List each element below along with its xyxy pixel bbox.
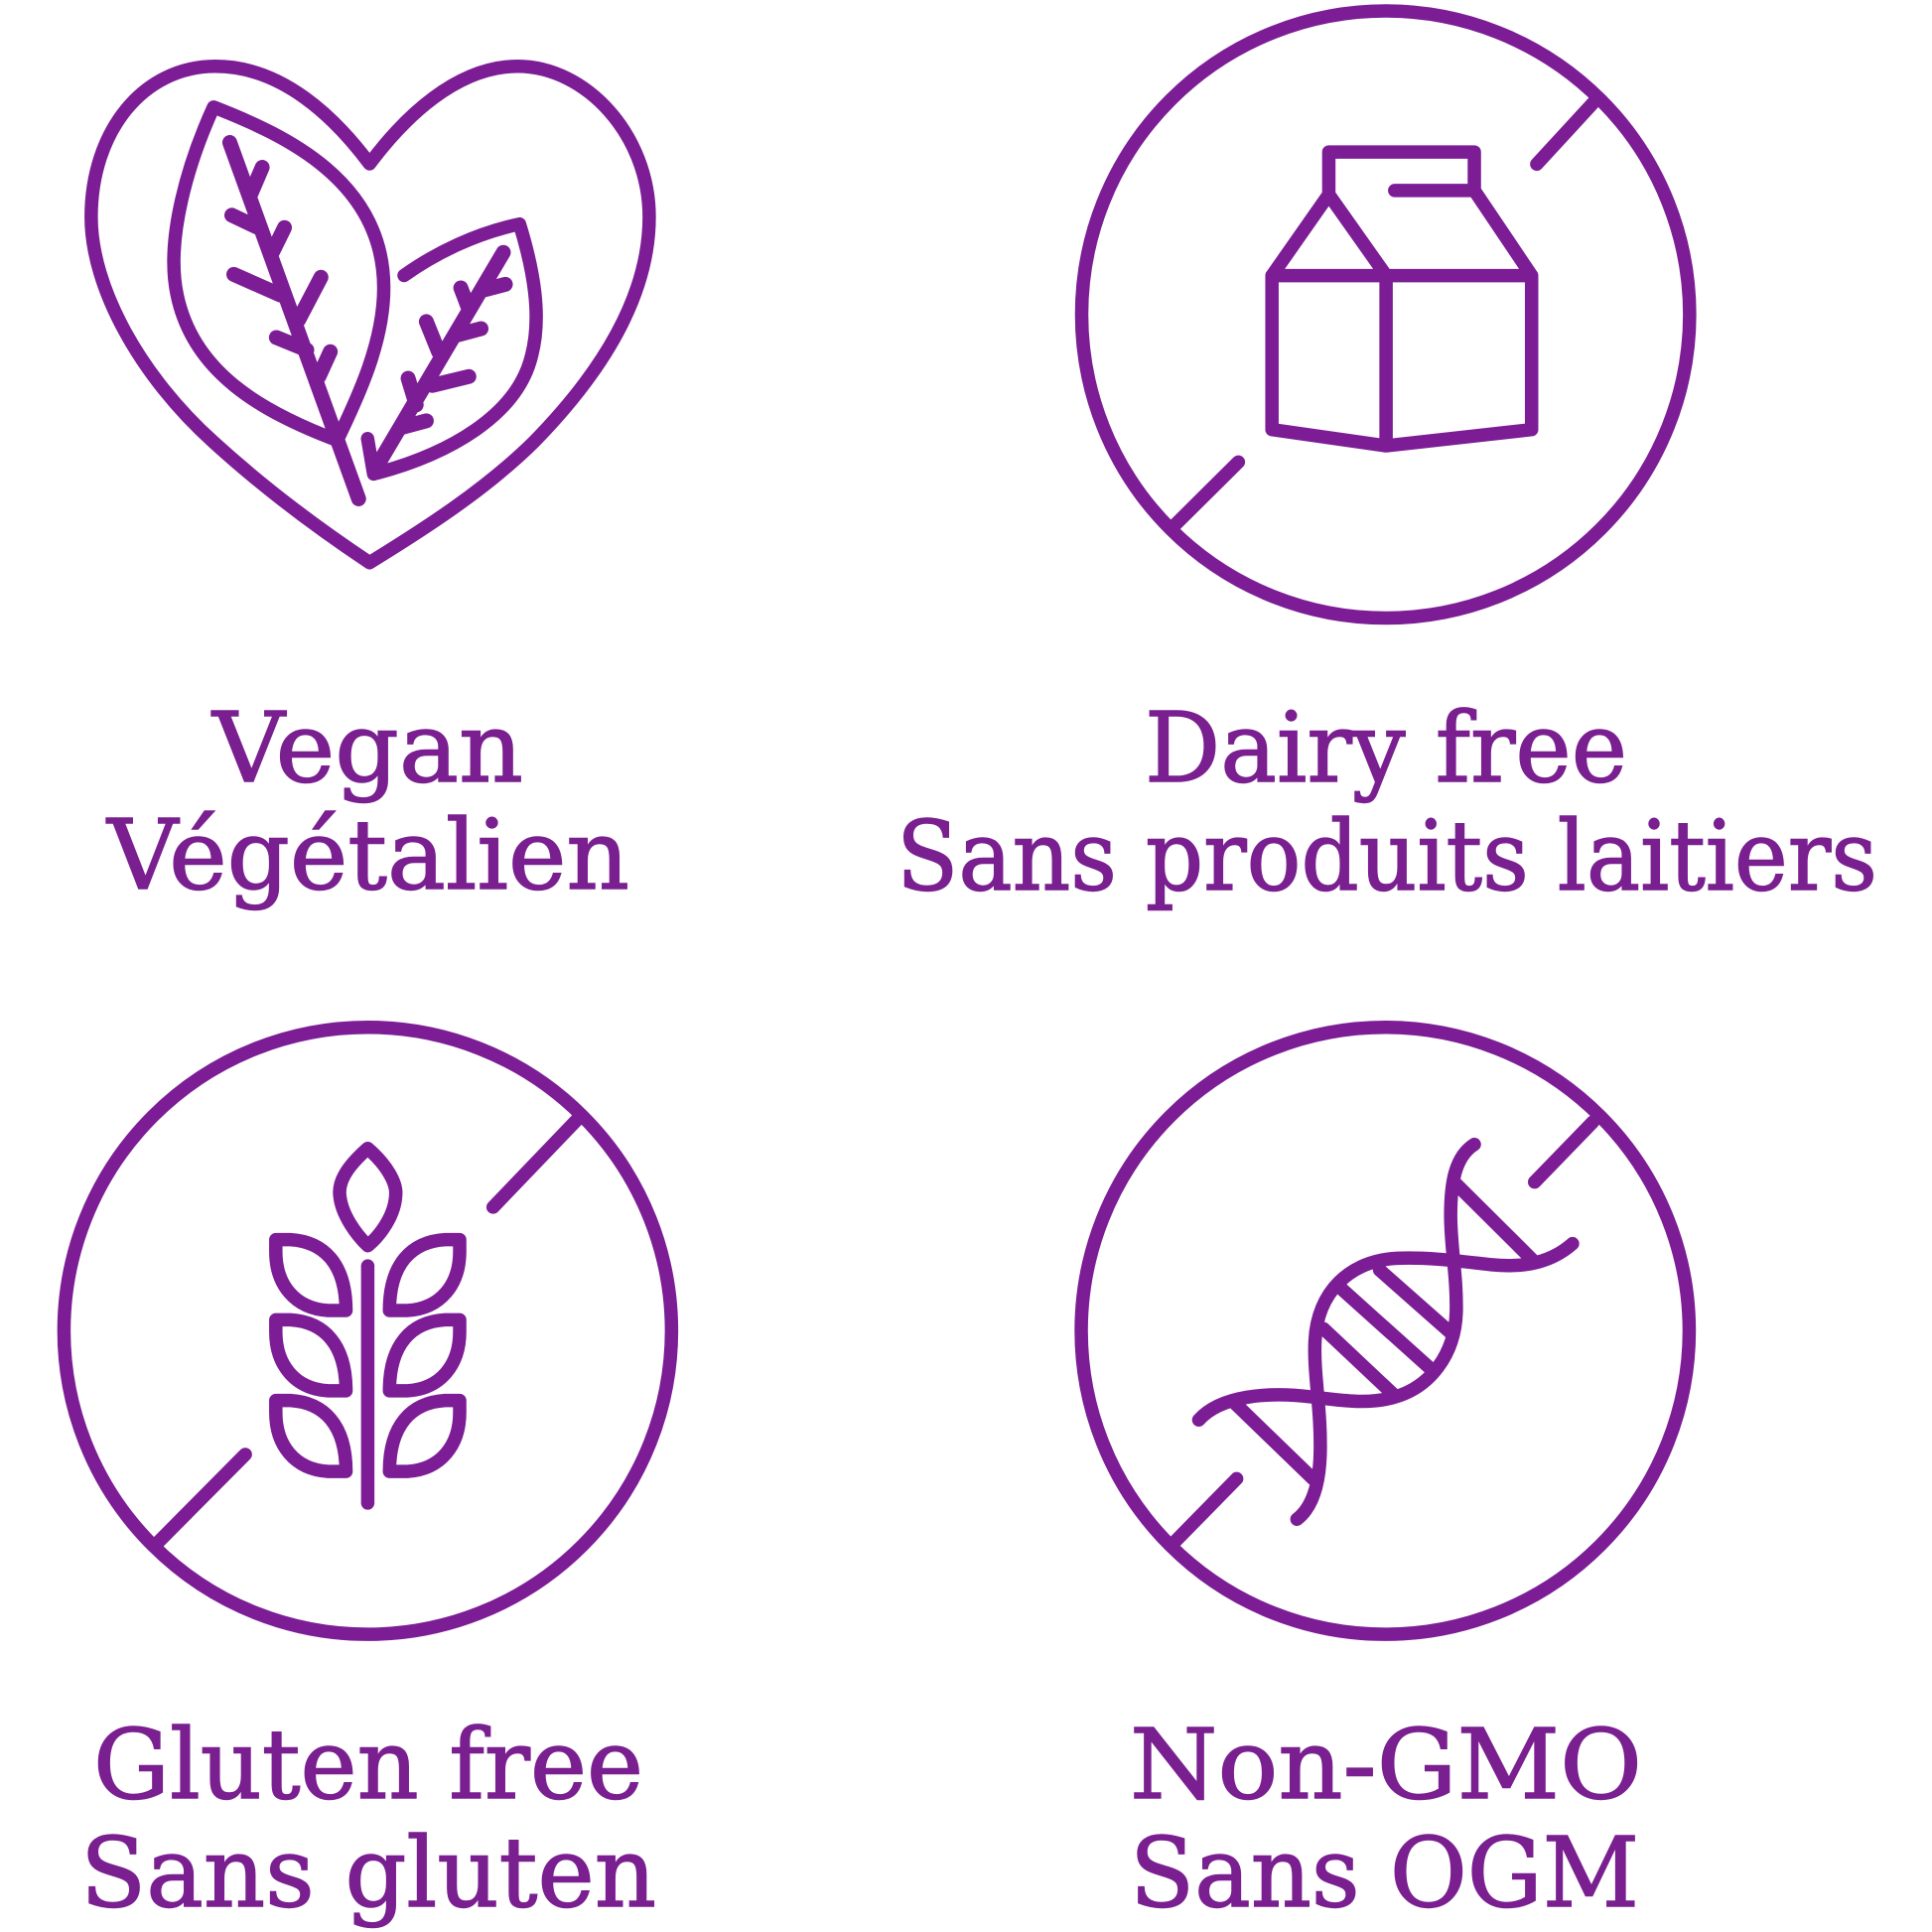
label: non-GMO — [1130, 1709, 1642, 1929]
label: non-GMO: Non-GMO — [1130, 1709, 1642, 1821]
prohibition circle — [64, 1028, 671, 1634]
slash segments — [1175, 103, 1592, 525]
icon: crossed-out wheat — [64, 1028, 671, 1634]
wheat grain top — [340, 1149, 396, 1246]
panel: dairy free — [897, 11, 1877, 912]
label: gluten free: Gluten free — [93, 1709, 643, 1821]
milk carton — [1272, 152, 1532, 446]
icon: heart with two leaves — [91, 67, 649, 563]
panel: vegan — [91, 67, 649, 911]
panel: non-GMO — [1081, 1028, 1689, 1929]
helix strands — [1198, 1145, 1474, 1420]
slash segments — [1175, 1122, 1592, 1542]
label: dairy free: Sans produits laitiers — [897, 800, 1877, 912]
small leaf — [367, 224, 536, 474]
label: vegan: Vegan — [211, 692, 523, 804]
icon: crossed-out DNA helix — [1081, 1028, 1689, 1634]
heart outline — [91, 67, 649, 563]
wheat grains left — [276, 1240, 346, 1471]
label: dairy free: Dairy free — [1145, 692, 1627, 804]
prohibition circle — [1081, 1028, 1689, 1634]
prohibition circle — [1081, 11, 1690, 619]
label: gluten free — [80, 1709, 656, 1929]
wheat grains right — [389, 1240, 460, 1471]
label: non-GMO: Sans OGM — [1130, 1817, 1639, 1929]
helix rungs — [1235, 1182, 1533, 1478]
panel: gluten free — [64, 1028, 671, 1929]
label: vegan — [106, 692, 629, 911]
label: vegan: Végétalien — [106, 799, 629, 911]
slash segments — [159, 1120, 577, 1542]
label: dairy free — [897, 692, 1877, 912]
icon: crossed-out milk carton — [1081, 11, 1690, 619]
label: gluten free: Sans gluten — [80, 1817, 656, 1929]
large leaf — [174, 107, 384, 498]
wheat stalk — [361, 1266, 374, 1503]
